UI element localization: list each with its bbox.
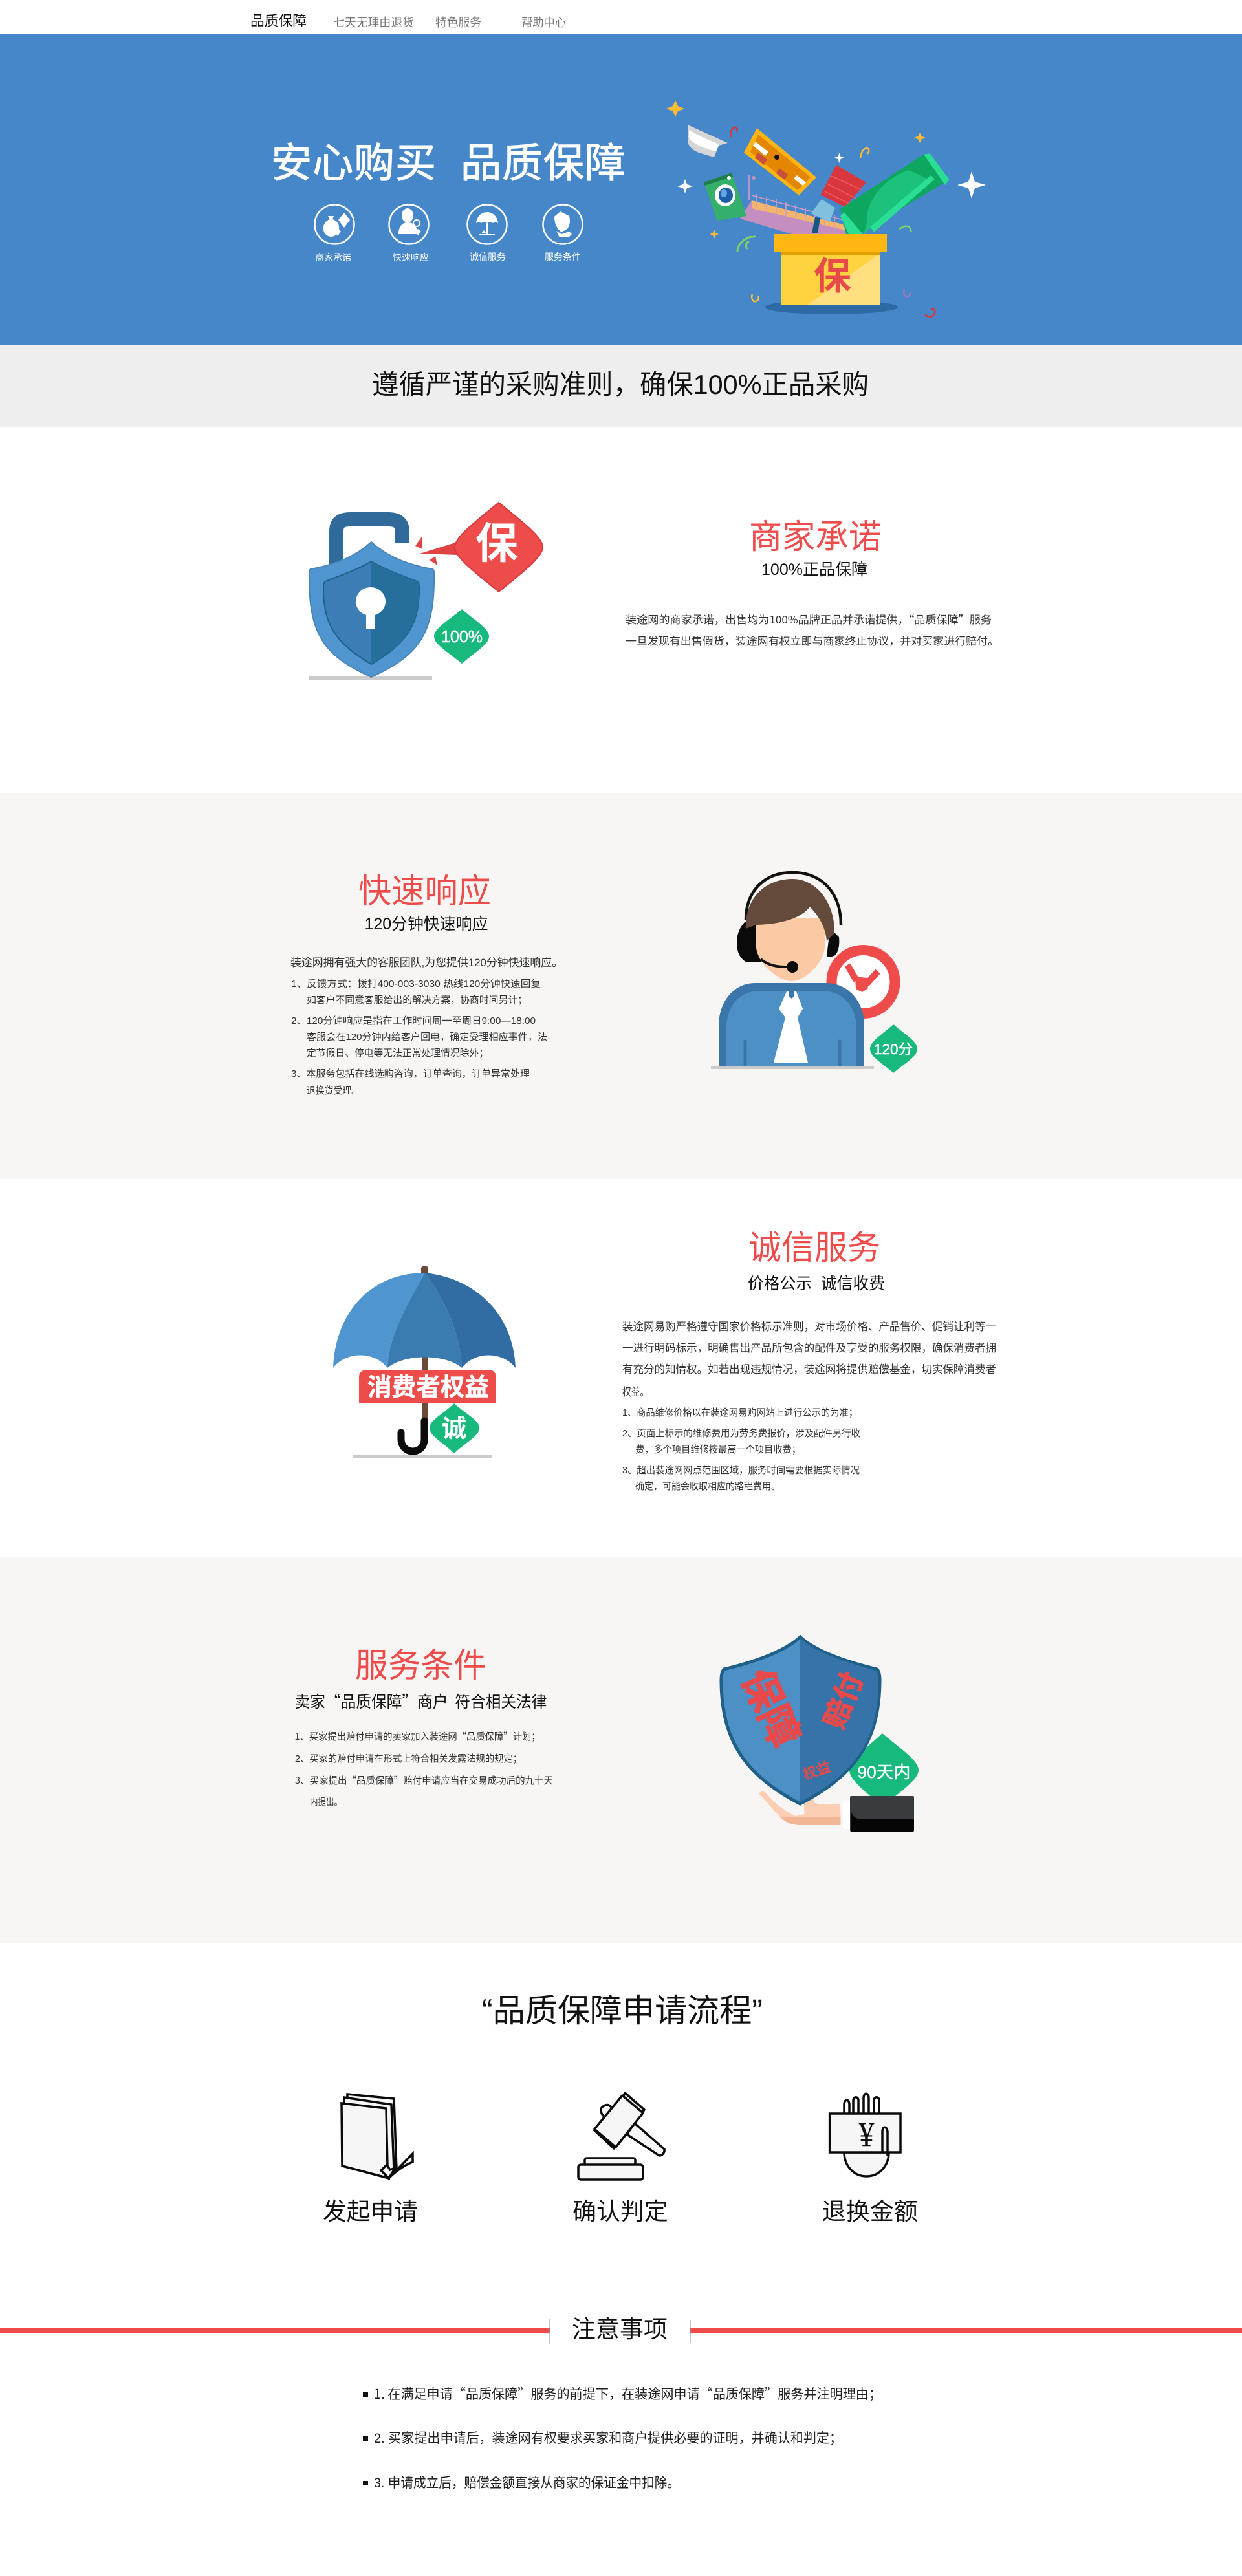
icon: documents [342, 2094, 413, 2178]
icon: service conditions: 服务条件 [545, 252, 581, 262]
hair [746, 879, 834, 941]
description text: 2、买家的赔付申请在形式上符合相关发露法规的规定； [295, 1753, 522, 1764]
headset band [746, 872, 841, 925]
panel: guarantee headline band [0, 345, 1242, 427]
keyhole [356, 587, 386, 616]
description text: 3、本服务包括在线选购咨询，订单查询，订单异常处理 [291, 1068, 530, 1079]
shield outer [309, 542, 434, 677]
note 2: 2. 买家提出申请后，装途网有权要求买家和商户提供必要的证明，并确认和判定； [374, 2431, 842, 2446]
90 days label: 90天内 [858, 1762, 911, 1782]
face [756, 918, 825, 981]
ground line [353, 1455, 492, 1458]
panel: notes [0, 2316, 1242, 2491]
description text: 费，多个项目维修按最高一个项目收费； [635, 1444, 801, 1455]
subheading: 卖家“品质保障”商户 符合相关法律 [295, 1689, 547, 1713]
sleeve [850, 1796, 914, 1832]
description text: 一进行明码标示，明确售出产品所包含的配件及享受的服务权限，确保消费者拥 [622, 1342, 996, 1354]
gift box body [781, 252, 880, 305]
umbrella handle [401, 1421, 424, 1451]
hand [759, 1791, 841, 1825]
gift box body: 保 [814, 255, 851, 298]
icon: gavel [578, 2093, 664, 2180]
description text: 退换货受理。 [307, 1085, 360, 1096]
icon: merchant promise: 商家承诺 [315, 252, 351, 263]
box shadow [765, 300, 898, 314]
step: submit application: 发起申请 [323, 2198, 418, 2225]
icon: fast response [389, 204, 429, 263]
badge leaf: 90 days [849, 1733, 919, 1806]
icon: honest service [467, 204, 507, 262]
subheading: 100%正品保障 [761, 561, 867, 579]
top navigation: 帮助中心 [521, 16, 566, 29]
speech diamond: 保 [415, 503, 543, 592]
step: refund amount [822, 2094, 918, 2225]
furniture: shelf [744, 128, 816, 195]
heading: honest service: 诚信服务 [748, 1229, 880, 1267]
step: confirm judgment: 确认判定 [572, 2198, 668, 2225]
step: refund amount: 退换金额 [822, 2198, 918, 2225]
section title: “品质保障申请流程” [482, 1993, 763, 2029]
clock [832, 950, 895, 1013]
panel: merchant promise [309, 503, 999, 680]
illustration: consumer rights umbrella [333, 1266, 516, 1458]
icon: fast response: 快速响应 [393, 252, 429, 263]
shield: 赔付 [818, 1669, 869, 1733]
cuff [843, 1801, 851, 1829]
sparkles [666, 100, 986, 239]
panel: hero banner [0, 34, 1242, 345]
note 1: 1. 在满足申请“品质保障”服务的前提下，在装途网申请“品质保障”服务并注明理由； [374, 2384, 882, 2403]
illustration: padlock shield [309, 503, 543, 680]
top navigation [250, 13, 566, 29]
lock shackle [336, 519, 402, 569]
ground line [711, 1066, 874, 1069]
panel: fast response [0, 793, 1242, 1179]
sign: consumer rights: 消费者权益 [367, 1374, 489, 1402]
white tie [774, 991, 808, 1063]
icon: hand with money: ¥ [859, 2115, 875, 2154]
description text: 如客户不同意客服给出的解决方案，协商时间另计； [307, 994, 527, 1006]
furniture: bed [740, 175, 848, 234]
description text: 确定，可能会收取相应的路程费用。 [635, 1480, 780, 1492]
shield: 保障 [733, 1663, 807, 1754]
panel: application process [323, 1993, 918, 2225]
umbrella shaft [422, 1356, 428, 1422]
description text: 装途网的商家承诺，出售均为100%品牌正品并承诺提供，“品质保障”服务 [626, 611, 992, 627]
heading: merchant promise: 商家承诺 [749, 519, 882, 556]
furniture: sofa [840, 154, 950, 234]
notes heading: 注意事项 [572, 2316, 668, 2343]
panel: honest service [333, 1229, 996, 1492]
description text: 2、120分钟响应是指在工作时间周一至周日9:00—18:00 [291, 1015, 536, 1026]
top navigation: 七天无理由退货 [333, 16, 414, 29]
step: submit application [323, 2094, 418, 2225]
panel: guarantee headline band: 遵循严谨的采购准则，确保100%正品采购 [372, 369, 869, 400]
confetti swirls [730, 127, 935, 317]
speech diamond: 保: 保 [475, 519, 518, 567]
description text [622, 1321, 996, 1492]
ground line [309, 676, 432, 680]
headset ear cups [737, 922, 839, 962]
shield: 权益 [801, 1759, 833, 1783]
description text: 1、商品维修价格以在装途网易购网站上进行公示的为准； [622, 1407, 858, 1418]
subheading: 120分钟快速响应 [365, 915, 488, 933]
blue suit [719, 983, 864, 1066]
description text: 3、超出装途网网点范围区域，服务时间需要根据实际情况 [622, 1465, 860, 1476]
icon: service conditions [543, 204, 582, 262]
furniture: washing machine [704, 173, 746, 221]
note 3: 3. 申请成立后，赔偿金额直接从商家的保证金中扣除。 [374, 2476, 680, 2491]
description text: 内提出。 [310, 1797, 342, 1808]
shield inner [323, 561, 419, 664]
illustration: customer service agent [711, 872, 917, 1073]
heading: fast response: 快速响应 [358, 873, 491, 911]
description text: 1、反馈方式：拨打400-003-3030 热线120分钟快速回复 [291, 978, 541, 990]
badge: 100% [434, 609, 489, 664]
umbrella canopy [333, 1273, 516, 1368]
heading: service conditions: 服务条件 [355, 1647, 486, 1685]
top navigation: 特色服务 [435, 16, 481, 29]
description text: 有充分的知情权。如若出现违规情况，装途网将提供赔偿基金，切实保障消费者 [622, 1363, 996, 1376]
description text: 3、买家提出“品质保障”赔付申请应当在交易成功后的九十天 [295, 1773, 553, 1787]
description text [295, 1729, 553, 1808]
badge: 100%: 100% [441, 627, 483, 646]
badge: 120 minutes: 120分 [874, 1041, 913, 1057]
step: confirm judgment [572, 2093, 668, 2225]
description text: 客服会在120分钟内给客户回电，确定受理相应事件，法 [307, 1031, 547, 1043]
badge: 诚 [430, 1403, 479, 1453]
subheading: 价格公示 诚信收费 [748, 1275, 885, 1293]
description text [290, 957, 563, 1096]
badge: 诚: 诚 [442, 1416, 466, 1443]
hero title: 安心购买 品质保障 [271, 141, 626, 186]
furniture: lamp [811, 199, 835, 233]
description text [626, 611, 999, 647]
microphone [761, 959, 787, 967]
description text: 装途网易购严格遵守国家价格标示准则，对市场价格、产品售价、促销让利等一 [622, 1321, 996, 1333]
illustration: guarantee shield and hand [721, 1637, 919, 1832]
shield [721, 1637, 880, 1804]
icon: honest service: 诚信服务 [470, 252, 506, 262]
description text: 2、页面上标示的维修费用为劳务费报价，涉及配件另行收 [622, 1428, 860, 1439]
notes heading rule [0, 2319, 1242, 2344]
gift box lid [774, 234, 887, 252]
top navigation: 品质保障 [250, 13, 307, 29]
icon: hand with money [830, 2094, 900, 2176]
illustration: gift box of home goods [666, 100, 986, 317]
umbrella tip [421, 1266, 428, 1275]
icon: merchant promise [314, 204, 354, 263]
panel: service conditions [0, 1557, 1242, 1943]
furniture: bathtub [688, 125, 728, 157]
description text: 权益。 [622, 1386, 649, 1398]
description text: 一旦发现有出售假货，装途网有权立即与商家终止协议，并对买家进行赔付。 [626, 635, 999, 647]
description text: 1、买家提出赔付申请的卖家加入装途网“品质保障”计划； [295, 1729, 541, 1743]
description text: 装途网拥有强大的客服团队,为您提供120分钟快速响应。 [290, 957, 563, 969]
description text: 定节假日、停电等无法正常处理情况除外； [307, 1047, 488, 1059]
badge: 120 minutes [870, 1024, 917, 1073]
furniture: red rug [820, 165, 866, 207]
